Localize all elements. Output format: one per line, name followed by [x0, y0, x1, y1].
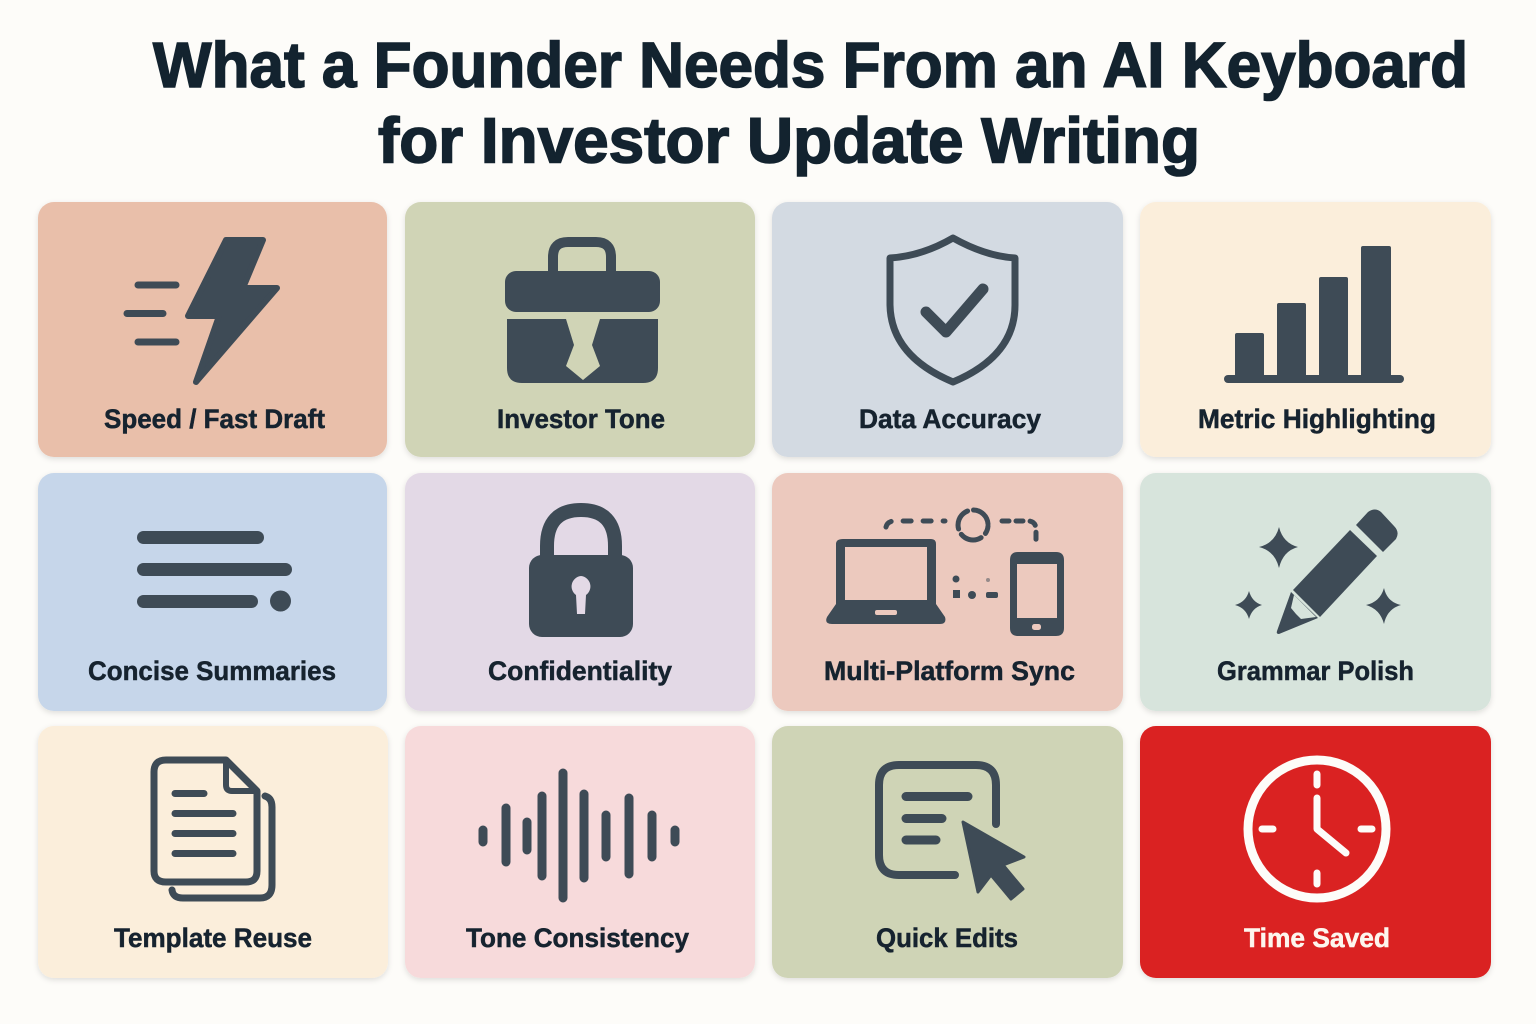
- label: Investor Tone: [497, 404, 665, 434]
- title: [153, 29, 1468, 176]
- icon: briefcase with tie: [505, 242, 660, 383]
- label: Grammar Polish: [1217, 656, 1414, 686]
- icon: document with cursor: [879, 765, 1024, 899]
- title: What a Founder Needs From an AI Keyboard: [153, 29, 1468, 101]
- panel: Metric Highlighting: [1140, 202, 1491, 457]
- label: Data Accuracy: [859, 404, 1041, 434]
- panel: Time Saved: [1140, 726, 1491, 978]
- panel: Grammar Polish: [1140, 473, 1491, 711]
- icon: sound wave: [483, 773, 675, 898]
- panel: Concise Summaries: [38, 473, 387, 711]
- icon: summary lines: [137, 531, 292, 612]
- label: Concise Summaries: [88, 656, 336, 686]
- label: Template Reuse: [114, 923, 312, 953]
- icon: shield with check: [890, 238, 1015, 382]
- panel: Quick Edits: [772, 726, 1123, 978]
- panel: Speed / Fast Draft: [38, 202, 387, 457]
- panel: Template Reuse: [38, 726, 388, 978]
- icon: bar chart: [1224, 246, 1404, 383]
- label: Tone Consistency: [466, 923, 689, 953]
- label: Speed / Fast Draft: [104, 404, 325, 434]
- icon: stacked documents: [154, 760, 272, 898]
- panel: Confidentiality: [405, 473, 755, 711]
- icon: pencil with sparkles: [1235, 510, 1401, 634]
- label: Multi-Platform Sync: [824, 656, 1075, 686]
- icon: padlock: [529, 510, 633, 637]
- title: for Investor Update Writing: [378, 104, 1200, 176]
- icon: lightning bolt with speed lines: [127, 240, 277, 382]
- icon: clock: [1248, 760, 1386, 898]
- panel: Tone Consistency: [405, 726, 755, 978]
- label: Time Saved: [1244, 923, 1390, 953]
- icon: laptop and phone sync: [826, 510, 1064, 636]
- label: Quick Edits: [876, 923, 1018, 953]
- panel: Data Accuracy: [772, 202, 1123, 457]
- label: Confidentiality: [488, 656, 672, 686]
- panel: Multi-Platform Sync: [772, 473, 1123, 711]
- label: Metric Highlighting: [1198, 404, 1436, 434]
- panel: Investor Tone: [405, 202, 755, 457]
